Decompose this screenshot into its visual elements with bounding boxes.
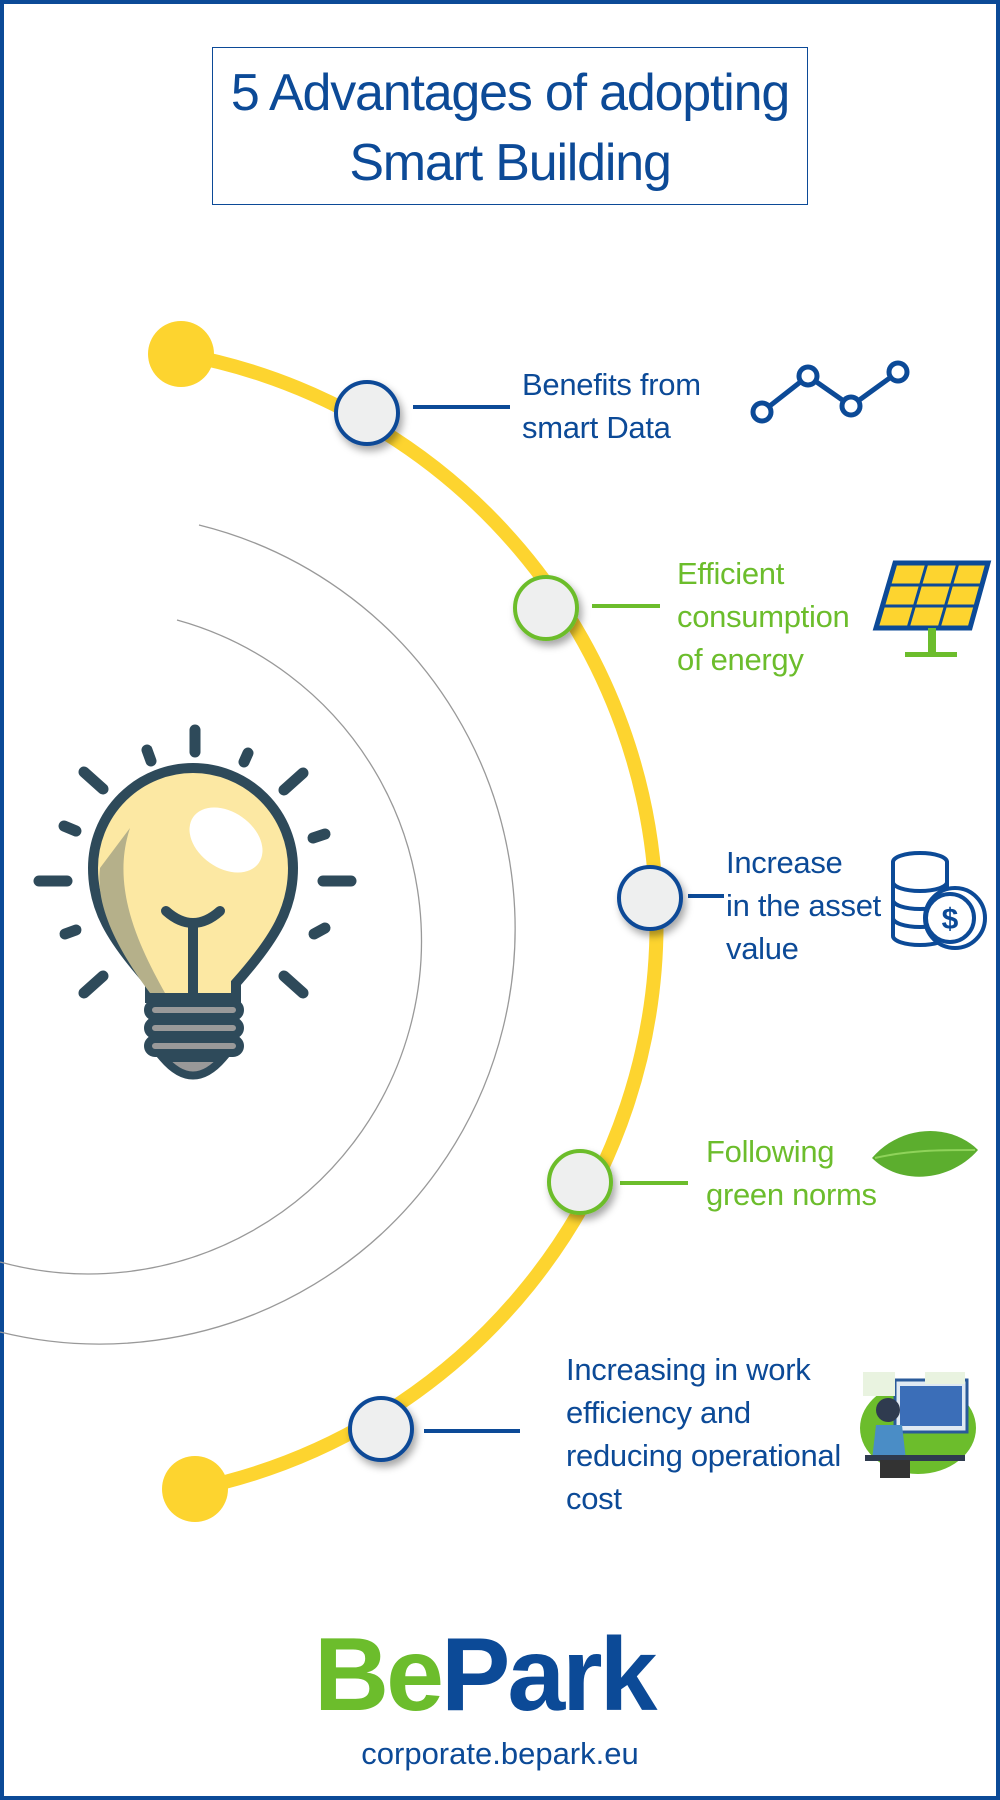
text: work efficiency: efficiency and [566, 1395, 751, 1430]
text: asset value: in the asset [726, 888, 881, 923]
text: work efficiency: cost [566, 1481, 622, 1516]
icon: leaf [872, 1131, 978, 1177]
icon: office worker [860, 1372, 976, 1478]
node circles [336, 382, 681, 1460]
text: efficient consumption: consumption [677, 599, 849, 634]
text: work efficiency [566, 1352, 841, 1516]
url: corporate.bepark.eu [361, 1736, 639, 1771]
text: benefits from smart data: smart Data [522, 410, 671, 445]
icon: line chart [753, 363, 907, 421]
text: green norms: green norms [706, 1177, 877, 1212]
logo: BePark: BePark [314, 1617, 654, 1733]
icon: coins with dollar [893, 853, 985, 948]
connectors [413, 407, 724, 1431]
icon: solar panel [876, 563, 988, 657]
text: work efficiency: reducing operational [566, 1438, 841, 1473]
text: efficient consumption: Efficient [677, 556, 784, 591]
text: green norms: Following [706, 1134, 834, 1169]
icon: light bulb [39, 730, 351, 1076]
text: asset value: value [726, 931, 799, 966]
text: asset value [726, 845, 881, 966]
text: benefits from smart data: Benefits from [522, 367, 701, 402]
text: efficient consumption [677, 556, 849, 677]
yellow timeline arc [148, 321, 657, 1522]
text: benefits from smart data [522, 367, 701, 445]
text: efficient consumption: of energy [677, 642, 804, 677]
text: green norms [706, 1134, 877, 1212]
title: 5 Advantages of adopting [231, 64, 789, 122]
title: Smart Building [349, 134, 671, 192]
icon: coins with dollar: $ [942, 903, 959, 936]
title [212, 47, 808, 205]
text: asset value: Increase [726, 845, 842, 880]
text: work efficiency: Increasing in work [566, 1352, 810, 1387]
gray decorative arcs [0, 525, 515, 1344]
